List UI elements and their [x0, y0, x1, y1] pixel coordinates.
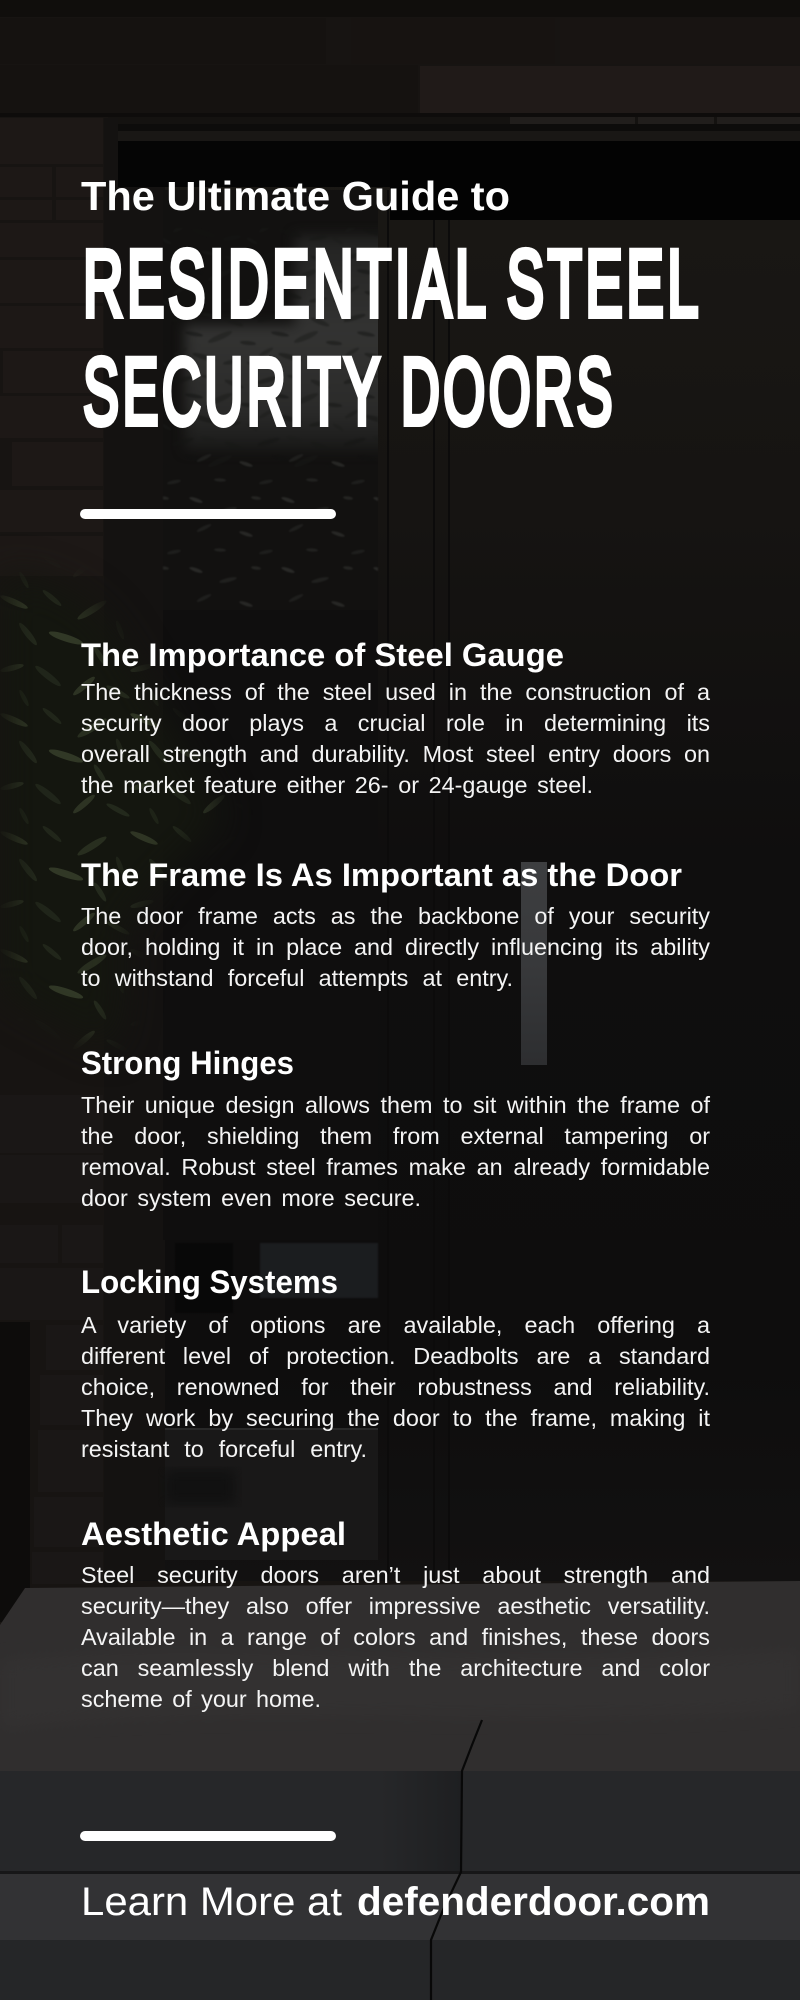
subtitle: The Ultimate Guide to: The Ultimate Guide to [81, 173, 510, 219]
paragraph: aesthetics [81, 1562, 710, 1712]
heading: frame: The Frame Is As Important as the Door [81, 857, 682, 893]
paragraph: hinges: Their unique design allows them to sit within the frame of [81, 1092, 710, 1118]
paragraph: aesthetics: Steel security doors aren’t just about strength and [81, 1562, 710, 1588]
paragraph: frame: to withstand forceful attempts at entry. [81, 965, 513, 991]
paragraph: steel gauge: the market feature either 26- or 24-gauge steel. [81, 772, 593, 798]
paragraph: steel gauge: overall strength and durability. Most steel entry doors on [81, 741, 710, 767]
paragraph: locks: A variety of options are available, each offering a [81, 1312, 710, 1338]
heading: steel gauge: The Importance of Steel Gauge [81, 637, 564, 673]
lintel shadow [118, 141, 390, 187]
paragraph: locks: resistant to forceful entry. [81, 1436, 367, 1462]
paragraph: aesthetics: Available in a range of colors and finishes, these doors [81, 1624, 710, 1650]
paragraph: hinges [81, 1092, 710, 1211]
paragraph: aesthetics: can seamlessly blend with the architecture and color [81, 1655, 710, 1681]
divider bar top [80, 509, 336, 519]
paragraph: frame [81, 903, 710, 991]
window pane with foliage [163, 221, 378, 1524]
heading: hinges: Strong Hinges [81, 1045, 294, 1081]
paragraph: steel gauge: The thickness of the steel used in the construction of a [81, 679, 710, 705]
door panel [118, 141, 800, 1581]
footer call to action: Learn More at [81, 1880, 342, 1924]
heading: locks: Locking Systems [81, 1264, 338, 1300]
paragraph: locks: choice, renowned for their robustness and reliability. [81, 1374, 710, 1400]
upper wall blocks [0, 0, 800, 141]
paragraph: frame: door, holding it in place and directly influencing its ability [81, 934, 710, 960]
paragraph: locks [81, 1312, 710, 1462]
paragraph: hinges: door system even more secure. [81, 1185, 421, 1211]
door seams [387, 190, 450, 1580]
paragraph: hinges: removal. Robust steel frames make an already formidable [81, 1154, 710, 1180]
paragraph: hinges: the door, shielding them from external tampering or [81, 1123, 710, 1149]
paragraph: aesthetics: scheme of your home. [81, 1686, 321, 1712]
concrete floor [0, 1581, 800, 2000]
paragraph: locks: different level of protection. Deadbolts are a standard [81, 1343, 710, 1369]
door handle [521, 862, 547, 1065]
paragraph: frame: The door frame acts as the backbone of your security [81, 903, 710, 929]
paragraph: locks: They work by securing the door to the frame, making it [81, 1405, 710, 1431]
lower-left bricks [0, 1095, 103, 1584]
footer call to action [81, 1880, 710, 1924]
title [81, 173, 702, 445]
paragraph: steel gauge [81, 679, 710, 798]
divider bar bottom [80, 1831, 336, 1841]
plant [1, 578, 224, 1044]
left brick wall [0, 118, 103, 576]
footer call to action: defenderdoor.com [357, 1880, 710, 1924]
paragraph: steel gauge: security door plays a crucial role in determining its [81, 710, 710, 736]
paragraph: aesthetics: security—they also offer impressive aesthetic versatility. [81, 1593, 710, 1619]
heading: aesthetics: Aesthetic Appeal [81, 1516, 346, 1552]
